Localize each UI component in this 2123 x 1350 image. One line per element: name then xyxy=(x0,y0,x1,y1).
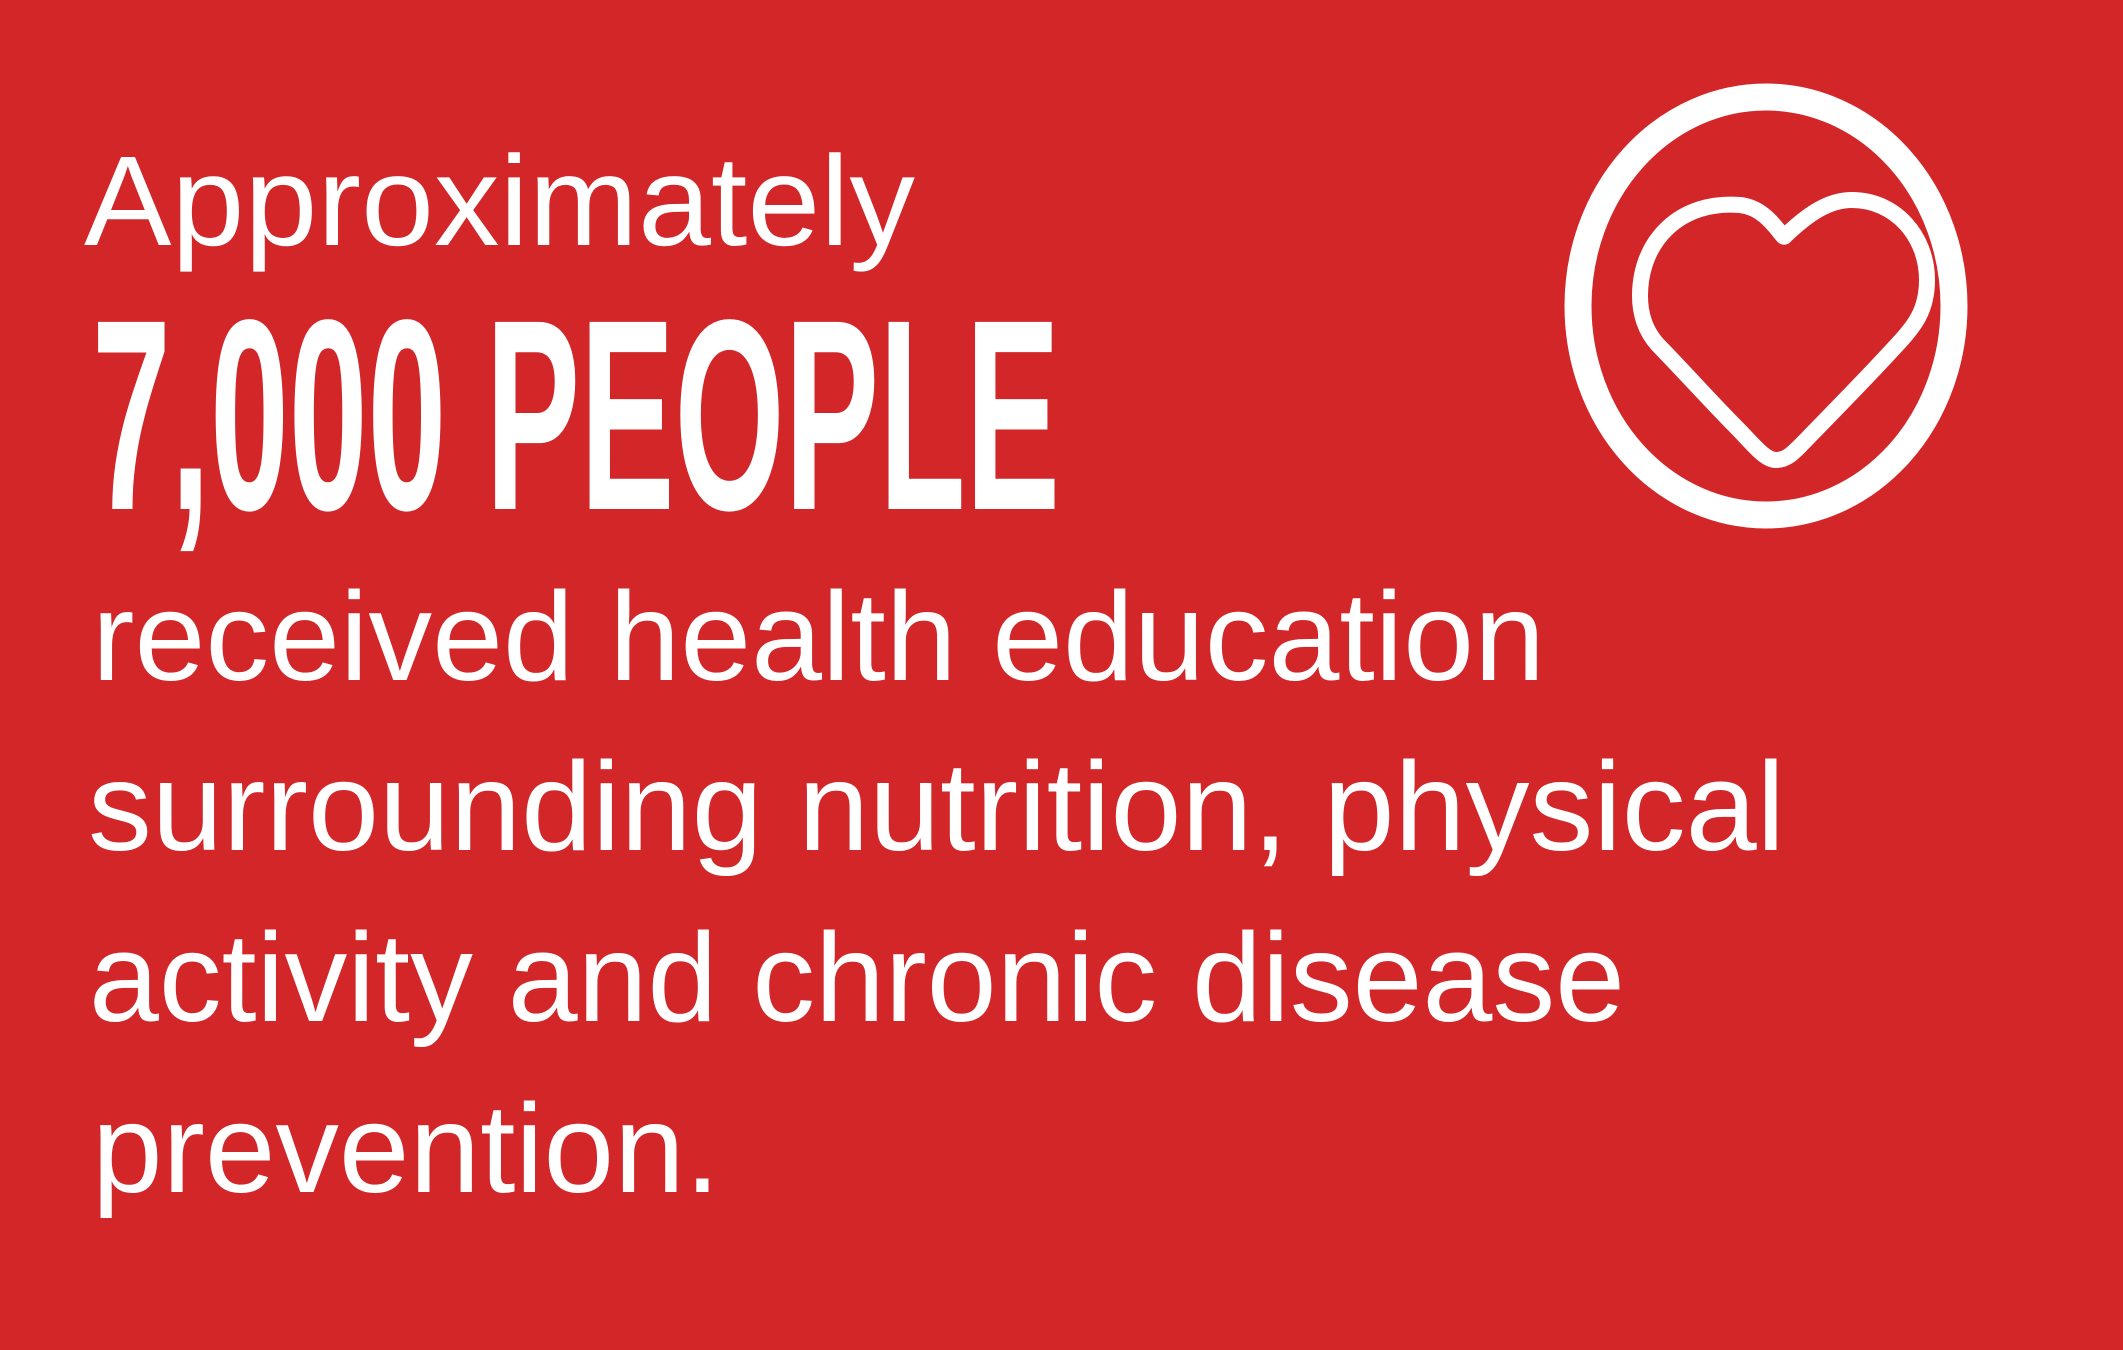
body text xyxy=(88,566,1785,1219)
body text: surrounding nutrition, physical xyxy=(88,736,1785,877)
icon: heart in circle xyxy=(1578,97,1954,515)
body text: activity and chronic disease xyxy=(89,907,1625,1048)
body text: prevention. xyxy=(92,1078,720,1219)
headline number: 7,000 PEOPLE: 7,000 PEOPLE xyxy=(92,263,1060,567)
heading: approximately: Approximately xyxy=(84,130,915,273)
body text: received health education xyxy=(92,566,1545,707)
